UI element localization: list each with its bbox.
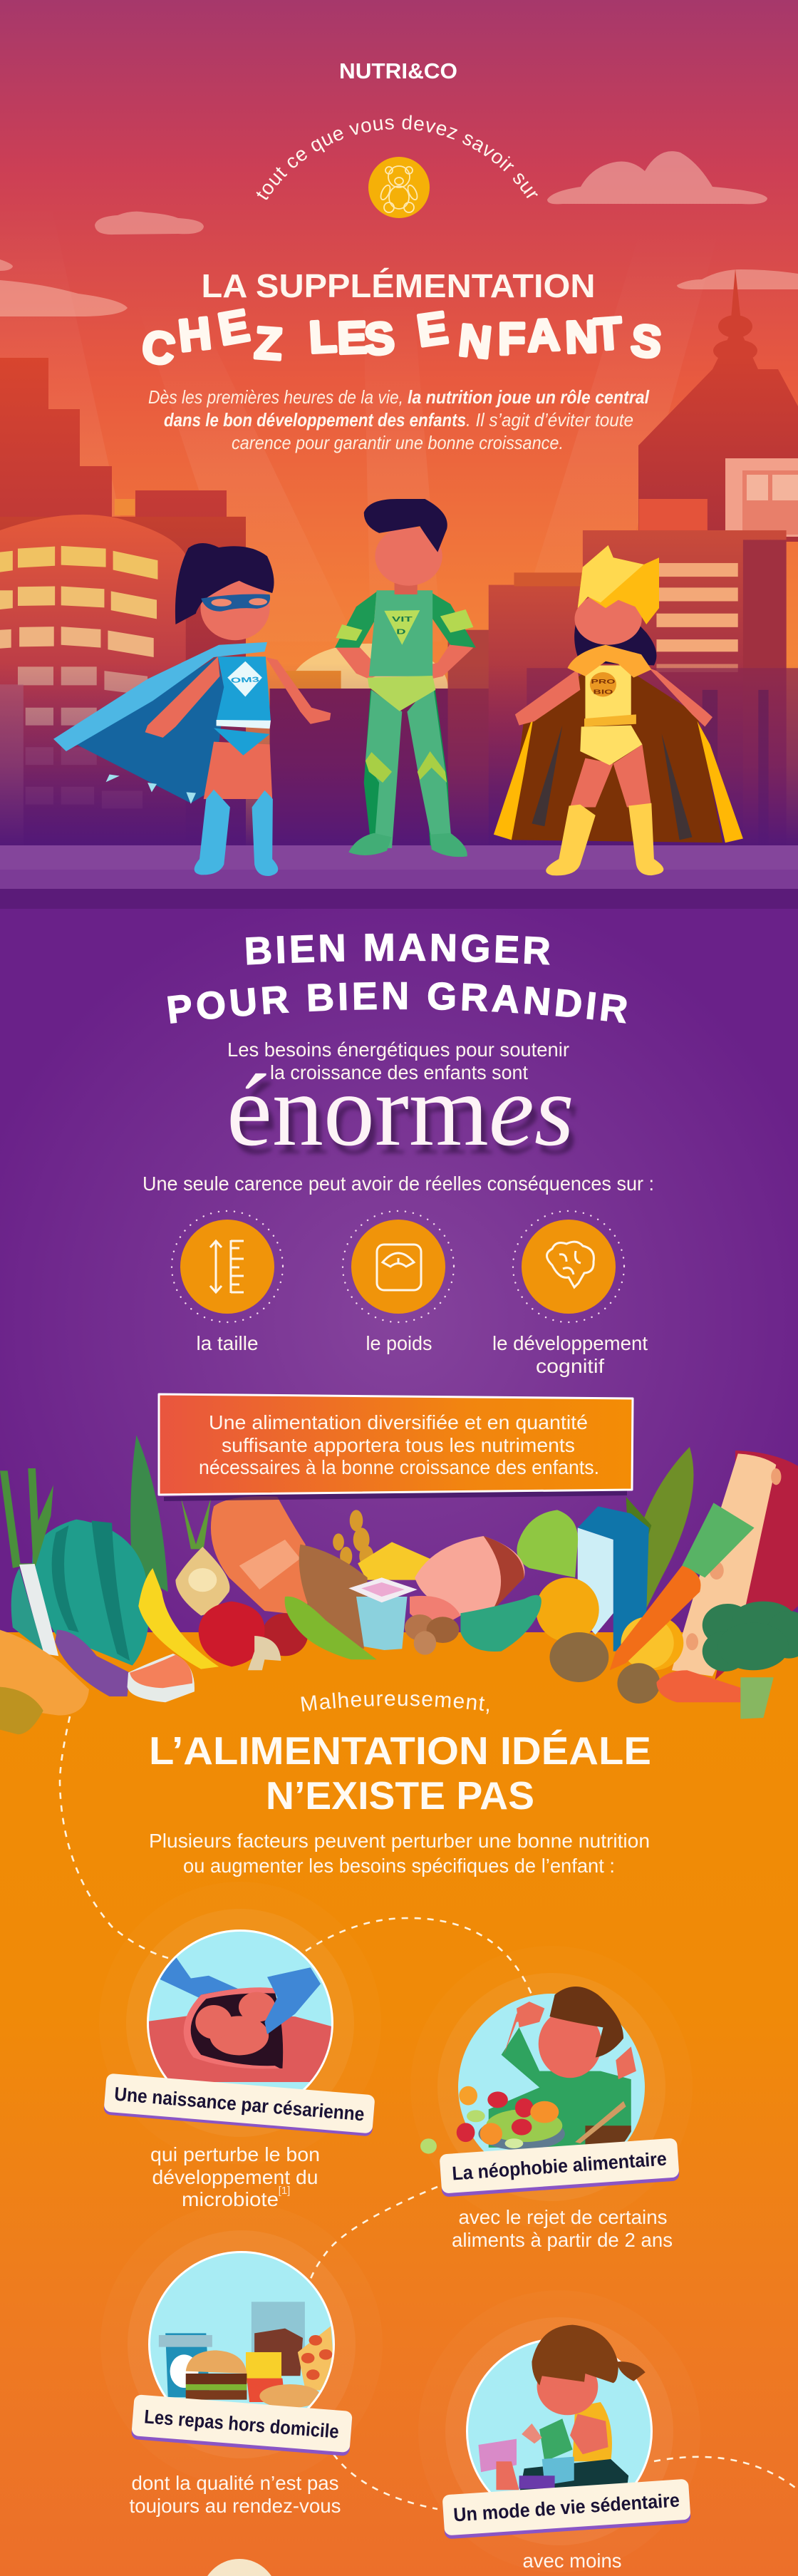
callout box [159,1394,633,1501]
feet [348,833,467,857]
factors intro: Plusieurs facteurs peuvent perturber une bonne nutrition [149,1830,650,1852]
big meat [211,1496,308,1616]
callout box: Une alimentation diversifiée et en quantité [209,1411,588,1433]
badge [590,672,616,696]
orange section background [0,1632,798,2576]
yogurt [356,1597,407,1650]
factor 4: description: avec moins [523,2550,621,2572]
factor 3: description [130,2472,341,2517]
heading: bien manger: BIEN MANGER [246,934,550,965]
purple section background [0,909,798,1643]
factor 1: description: microbiote [182,2188,279,2210]
broccoli [740,1677,774,1719]
salmon [656,1670,745,1702]
hair [364,499,447,552]
arched word: malheureusement: Malheureusement, [301,1692,489,1714]
factor 3: description: dont la qualité n’est pas [131,2472,339,2494]
watermelon [32,1520,150,1666]
pea pod [285,1597,377,1659]
cape [509,674,722,843]
factor 1: description: développement du [152,2166,318,2188]
factor 1: label: Une naissance par césarienne [113,2083,366,2125]
factor 1: description [150,2143,320,2210]
sun rays [0,200,720,713]
badge [227,661,262,696]
factor 1: description: qui perturbe le bon [150,2143,320,2165]
torso [585,665,631,720]
intro paragraph: la nutrition joue un rôle central [408,386,650,408]
logo: NUTRI&CO [339,58,457,83]
nuts [405,1614,435,1641]
sky background [0,0,798,848]
factor 3: description: toujours au rendez-vous [130,2495,341,2517]
halos [99,1882,700,2572]
icon: scale [343,1211,454,1322]
milk carton [578,1506,649,1652]
food illustration [0,1435,798,1734]
steak [128,1654,195,1702]
arms [515,668,712,727]
head [574,593,642,645]
potatoes [549,1632,608,1682]
title line 1: LA SUPPLÉMENTATION [201,267,596,304]
cloud: right large [547,151,767,204]
character: boy vitamin D: D [396,628,406,636]
factors intro: ou augmenter les besoins spécifiques de l’enfant : [183,1855,615,1877]
factor 1: label [103,2073,375,2136]
character: girl probio: BIO [593,689,613,696]
factor 2: label: La néophobie alimentaire [451,2148,668,2184]
hair [175,543,274,624]
label: le développement cognitif: le développement [492,1332,648,1354]
factor 4: label: Un mode de vie sédentaire [452,2489,680,2526]
lemon [624,1616,683,1670]
mushroom [248,1636,281,1670]
boots [195,790,278,876]
character: girl omega 3: OM3 [230,676,260,685]
character: girl omega 3 [53,543,331,876]
torso [369,590,432,676]
big cheese [715,1451,798,1680]
wheat [333,1510,373,1567]
factor 2: neophobia illustration [420,1987,645,2154]
eggplant [55,1630,130,1696]
chevrons [366,752,392,783]
character: boy vitamin D [335,499,476,857]
left stepped tower [0,358,227,865]
intro paragraph: . Il s’agit d’éviter toute [466,409,633,431]
pink building with window [725,458,798,537]
factor 2: label [440,2138,680,2198]
heading: l'alimentation idéale: N’EXISTE PAS [266,1773,534,1818]
cloud: right edge [677,269,798,289]
intro paragraph: dans le bon développement des enfants [164,409,466,431]
briefs [368,676,435,711]
factor 2: description: aliments à partir de 2 ans [452,2229,673,2251]
onion [181,1497,211,1549]
squash [0,1630,89,1716]
factor 2: description: avec le rejet de certains [459,2206,667,2228]
factors intro [149,1830,650,1877]
factor 4: label [442,2479,691,2539]
legs [570,758,613,807]
icon: height [172,1211,283,1322]
briefs [580,726,642,766]
torso and briefs [217,656,271,721]
top [567,645,651,678]
badge [384,610,420,645]
word: énormes: énormes [227,1054,574,1168]
intro paragraph: Dès les premières heures de la vie, [148,386,403,408]
factor 2: description [452,2206,673,2251]
label: le développement cognitif [492,1332,648,1377]
carrot [610,1566,700,1670]
sleeves [335,592,377,648]
neck and head [395,575,418,594]
head [200,576,270,640]
leek right [682,1503,755,1577]
cloud: left edge [0,259,128,316]
intro text: la croissance des enfants sont [270,1061,528,1083]
legs [366,690,402,848]
mask [201,594,270,612]
forearms [336,644,473,680]
dashed connectors [60,1716,798,2509]
back hair [574,617,656,665]
boots [546,803,663,875]
avocado [460,1595,542,1652]
character: girl probio [494,545,743,875]
character: boy vitamin D: VIT [392,616,413,624]
ham [415,1536,524,1616]
factor 1: description: [1] [279,2185,290,2197]
leek left [0,1468,53,1568]
heading: l'alimentation idéale [149,1729,651,1818]
lettuce [517,1510,578,1577]
city buildings [0,499,798,848]
consequences line: Une seule carence peut avoir de réelles conséquences sur : [142,1173,654,1195]
intro paragraph: carence pour garantir une bonne croissance. [232,432,564,453]
intro paragraph [148,386,650,453]
banana [138,1568,219,1669]
right tower and roof [638,269,798,542]
factor 5: partial circle [201,2559,278,2576]
title line 2: CHEZ LES ENFANTS [139,301,664,375]
factor 1: caesarean illustration [147,1930,333,2090]
cloud: left small [95,212,204,235]
tomato [262,1613,308,1656]
label: le développement cognitif: cognitif [536,1355,604,1377]
belt [584,714,636,727]
label: la taille: la taille [197,1332,258,1354]
arms [145,656,331,738]
icon: brain [513,1211,624,1322]
factor 3: label [131,2394,353,2456]
pear [0,1687,43,1734]
heading: pour bien grandir: POUR BIEN GRANDIR [167,982,627,1024]
yellow hair [578,545,659,624]
character: girl probio: PRO [591,679,616,685]
legs [204,742,272,799]
intro text [227,1039,569,1083]
factor 3: fast food illustration [148,2251,335,2408]
tall leaves [130,1435,168,1592]
factor 3: label: Les repas hors domicile [143,2406,340,2443]
yellow cheese [358,1542,435,1580]
callout box: nécessaires à la bonne croissance des enfants. [199,1456,599,1478]
callout box: suffisante apportera tous les nutriments [222,1434,575,1456]
factor 4: sedentary illustration [466,2325,653,2492]
ground [0,845,798,910]
label: le poids: le poids [366,1332,432,1354]
bread [299,1545,368,1649]
cape [76,657,225,803]
fade to purple [0,663,798,848]
heading: l'alimentation idéale: L’ALIMENTATION IDÉALE [149,1729,651,1773]
arched subtitle: tout ce que vous devez savoir sur [256,115,538,200]
icon: teddy bear [368,157,430,218]
intro text: Les besoins énergétiques pour soutenir [227,1039,569,1061]
orange fruit [536,1577,599,1642]
